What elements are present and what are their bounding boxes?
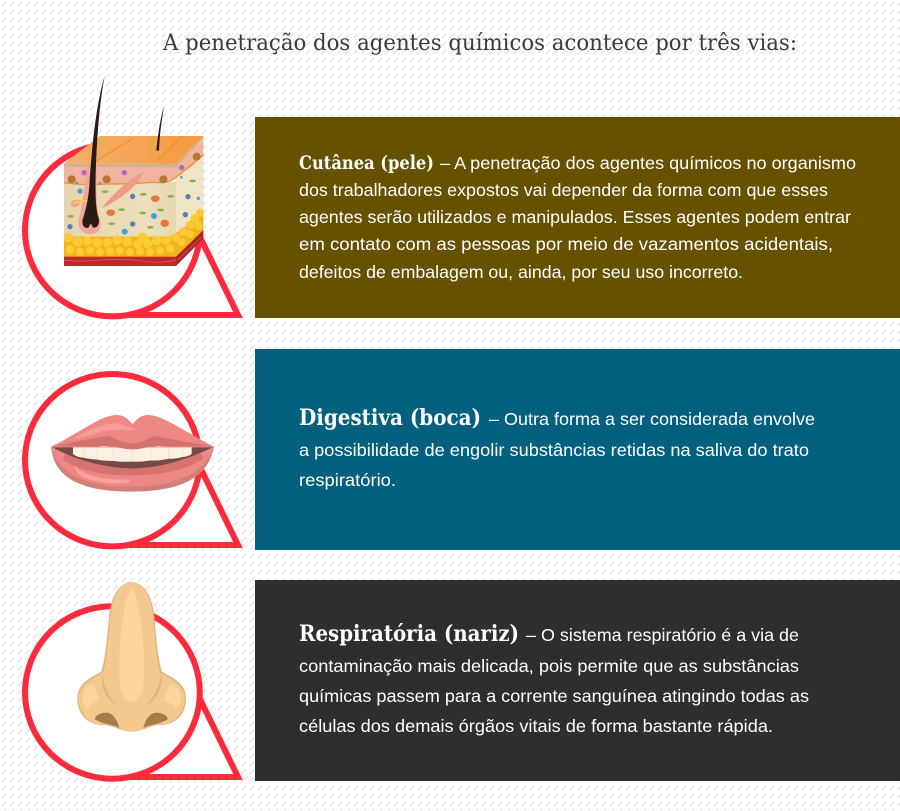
icon: speech bubble 3 bbox=[25, 606, 238, 779]
text block: cutânea: Cutânea (pele) bbox=[299, 152, 434, 174]
skin cells bbox=[67, 153, 201, 235]
text block: digestiva: a possibilidade de engolir substâncias retidas na saliva do trato bbox=[299, 440, 809, 460]
icon: lips bbox=[51, 415, 214, 492]
text block: cutânea: dos trabalhadores expostos vai depender da forma com que esses bbox=[299, 180, 828, 200]
text block: digestiva: – Outra forma a ser considerada envolve bbox=[489, 409, 815, 429]
text block: digestiva: respiratório. bbox=[299, 470, 396, 490]
panel: cutânea bbox=[255, 117, 900, 318]
text block: cutânea: agentes serão utilizados e manipulados. Esses agentes podem entrar bbox=[299, 207, 851, 227]
text block: cutânea: em contato com as pessoas por meio de vazamentos acidentais, bbox=[299, 234, 833, 254]
text block: respiratória: – O sistema respiratório é a via de bbox=[526, 625, 799, 645]
panel: respiratória bbox=[255, 580, 900, 781]
text block: respiratória: Respiratória (nariz) bbox=[299, 621, 519, 647]
icon: nose bbox=[77, 582, 186, 732]
sebaceous gland bbox=[71, 200, 87, 207]
text block: cutânea: – A penetração dos agentes químicos no organismo bbox=[440, 153, 856, 173]
follicle bbox=[79, 167, 101, 234]
icon: skin cross-section bbox=[64, 76, 204, 266]
text block: digestiva: Digestiva (boca) bbox=[299, 405, 481, 431]
text block: respiratória: contaminação mais delicada, pois permite que as substâncias bbox=[299, 656, 799, 676]
arrector muscle bbox=[102, 172, 143, 208]
title: A penetração dos agentes químicos acontece por três vias: bbox=[162, 30, 797, 56]
icon: speech bubble 2 bbox=[25, 374, 238, 546]
text block: respiratória bbox=[299, 621, 809, 736]
text block: cutânea: defeitos de embalagem ou, ainda, por seu uso incorreto. bbox=[299, 262, 743, 282]
fat layer bbox=[64, 209, 204, 257]
teeth bbox=[73, 447, 192, 462]
panel: digestiva bbox=[255, 349, 900, 550]
hair bbox=[82, 76, 105, 228]
text block: cutânea bbox=[299, 152, 856, 282]
text block: respiratória: químicas passem para a corrente sanguínea atingindo todas as bbox=[299, 686, 809, 706]
icon: speech bubble 1 bbox=[25, 144, 238, 316]
text block: digestiva bbox=[299, 405, 815, 490]
muscle layer bbox=[64, 257, 176, 266]
text block: respiratória: células dos demais órgãos vitais de forma bastante rápida. bbox=[299, 716, 773, 736]
